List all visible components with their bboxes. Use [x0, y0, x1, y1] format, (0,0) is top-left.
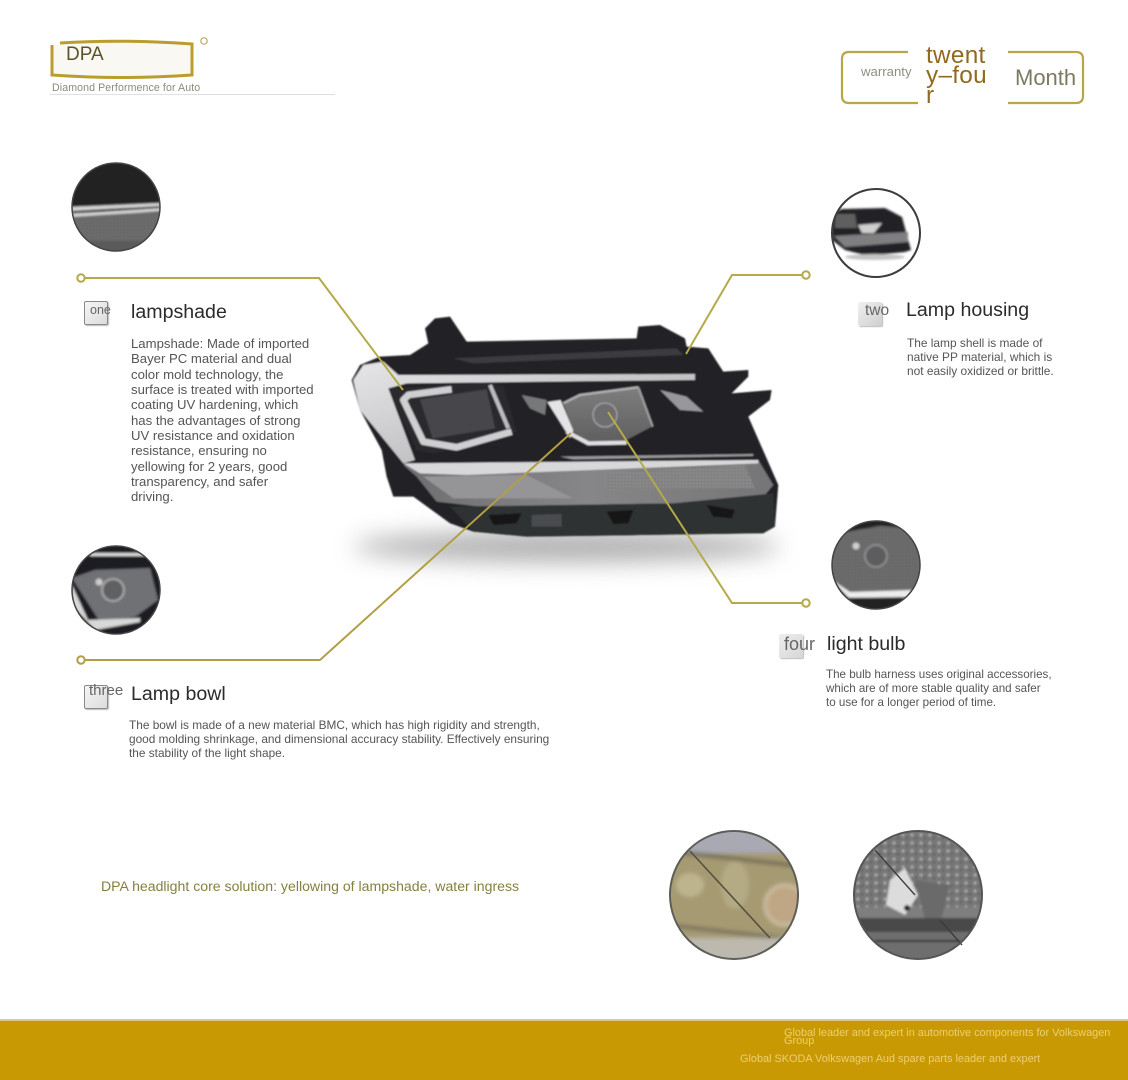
badge number: three: three [89, 682, 123, 699]
warranty duration [926, 42, 987, 109]
logo text: DPA [66, 44, 104, 65]
warranty label: warranty [861, 64, 912, 79]
comparison circle: water ingress [852, 829, 984, 962]
heading: lamp bowl: Lamp bowl [131, 683, 226, 705]
badge number: four: four [784, 634, 815, 654]
badge: two [858, 302, 882, 326]
text: lamp housing description: native PP material, which is [907, 350, 1052, 364]
detail circle: lamp bowl [70, 545, 162, 637]
section: lamp bowl [84, 682, 549, 760]
text: lampshade description: resistance, ensuring no [131, 443, 267, 458]
logo tagline: Diamond Performence for Auto [52, 82, 200, 94]
text: lamp housing description [907, 336, 1054, 378]
text: lampshade description: has the advantages of strong [131, 413, 300, 428]
footer line 1: Group [784, 1035, 814, 1047]
badge: three [84, 685, 108, 709]
footer band [0, 1019, 1128, 1080]
text: lampshade description: yellowing for 2 years, good [131, 459, 287, 474]
warranty unit: Month [1015, 65, 1076, 90]
warranty frame [842, 52, 1083, 103]
warranty duration: twent [926, 42, 986, 69]
badge: four [779, 634, 803, 658]
text: lampshade description: UV resistance and oxidation [131, 428, 295, 443]
comparison circle: yellowed lampshade [668, 829, 805, 962]
warranty duration: r [926, 82, 934, 109]
detail circle: lamp housing [832, 189, 920, 277]
heading: lampshade: lampshade [131, 301, 227, 323]
text: lamp housing description: not easily oxidized or brittle. [907, 364, 1054, 378]
heading: light bulb: light bulb [827, 633, 905, 655]
text: lampshade description: color mold technology, the [131, 367, 283, 382]
text: lampshade description: driving. [131, 489, 173, 504]
text: light bulb description: which are of more stable quality and safer [826, 682, 1041, 695]
text: lampshade description: transparency, and safer [131, 474, 268, 489]
section: lamp housing [858, 299, 1054, 378]
badge number: one: one [90, 303, 111, 317]
text: lampshade description: Lampshade: Made of imported [131, 336, 309, 351]
text: lampshade description: surface is treated with imported [131, 382, 314, 397]
core solution statement: DPA headlight core solution: yellowing of lampshade, water ingress [101, 878, 519, 894]
badge number: two: two [865, 302, 889, 319]
section: lampshade [84, 301, 314, 504]
leader line: lamp bowl [77, 433, 571, 664]
text: light bulb description: to use for a longer period of time. [826, 696, 996, 709]
badge: one [84, 301, 108, 325]
text: lamp bowl description [129, 718, 549, 760]
footer line 1 [784, 1027, 1110, 1047]
detail circle: lampshade [70, 162, 162, 254]
logo underline [50, 94, 335, 96]
leader line: light bulb [608, 412, 810, 607]
text: lampshade description: coating UV hardening, which [131, 397, 298, 412]
text: lampshade description [131, 336, 314, 504]
section: light bulb [779, 633, 1052, 709]
graphics layer: headlight, leader lines and detail circles [50, 37, 1084, 960]
text: lamp bowl description: The bowl is made of a new material BMC, which has high rigidity and strength, [129, 718, 540, 732]
text: lampshade description: Bayer PC material and dual [131, 351, 292, 366]
footer line 2: Global SKODA Volkswagen Aud spare parts leader and expert [740, 1053, 1040, 1065]
headlight product image [352, 317, 780, 562]
text: lamp bowl description: good molding shrinkage, and dimensional accuracy stability. Effectively ensuring [129, 732, 549, 746]
text: lamp bowl description: the stability of the light shape. [129, 746, 285, 760]
footer line 1: Global leader and expert in automotive components for Volkswagen [784, 1027, 1110, 1039]
text: light bulb description: The bulb harness uses original accessories, [826, 668, 1052, 681]
warranty duration: y–fou [926, 62, 987, 89]
detail circle: light bulb [830, 520, 922, 612]
heading: lamp housing: Lamp housing [906, 299, 1029, 321]
leader line: lamp housing [686, 271, 810, 354]
text: lamp housing description: The lamp shell is made of [907, 336, 1042, 350]
leader line: lampshade [77, 274, 403, 390]
logo frame [52, 38, 207, 78]
text: light bulb description [826, 668, 1052, 709]
